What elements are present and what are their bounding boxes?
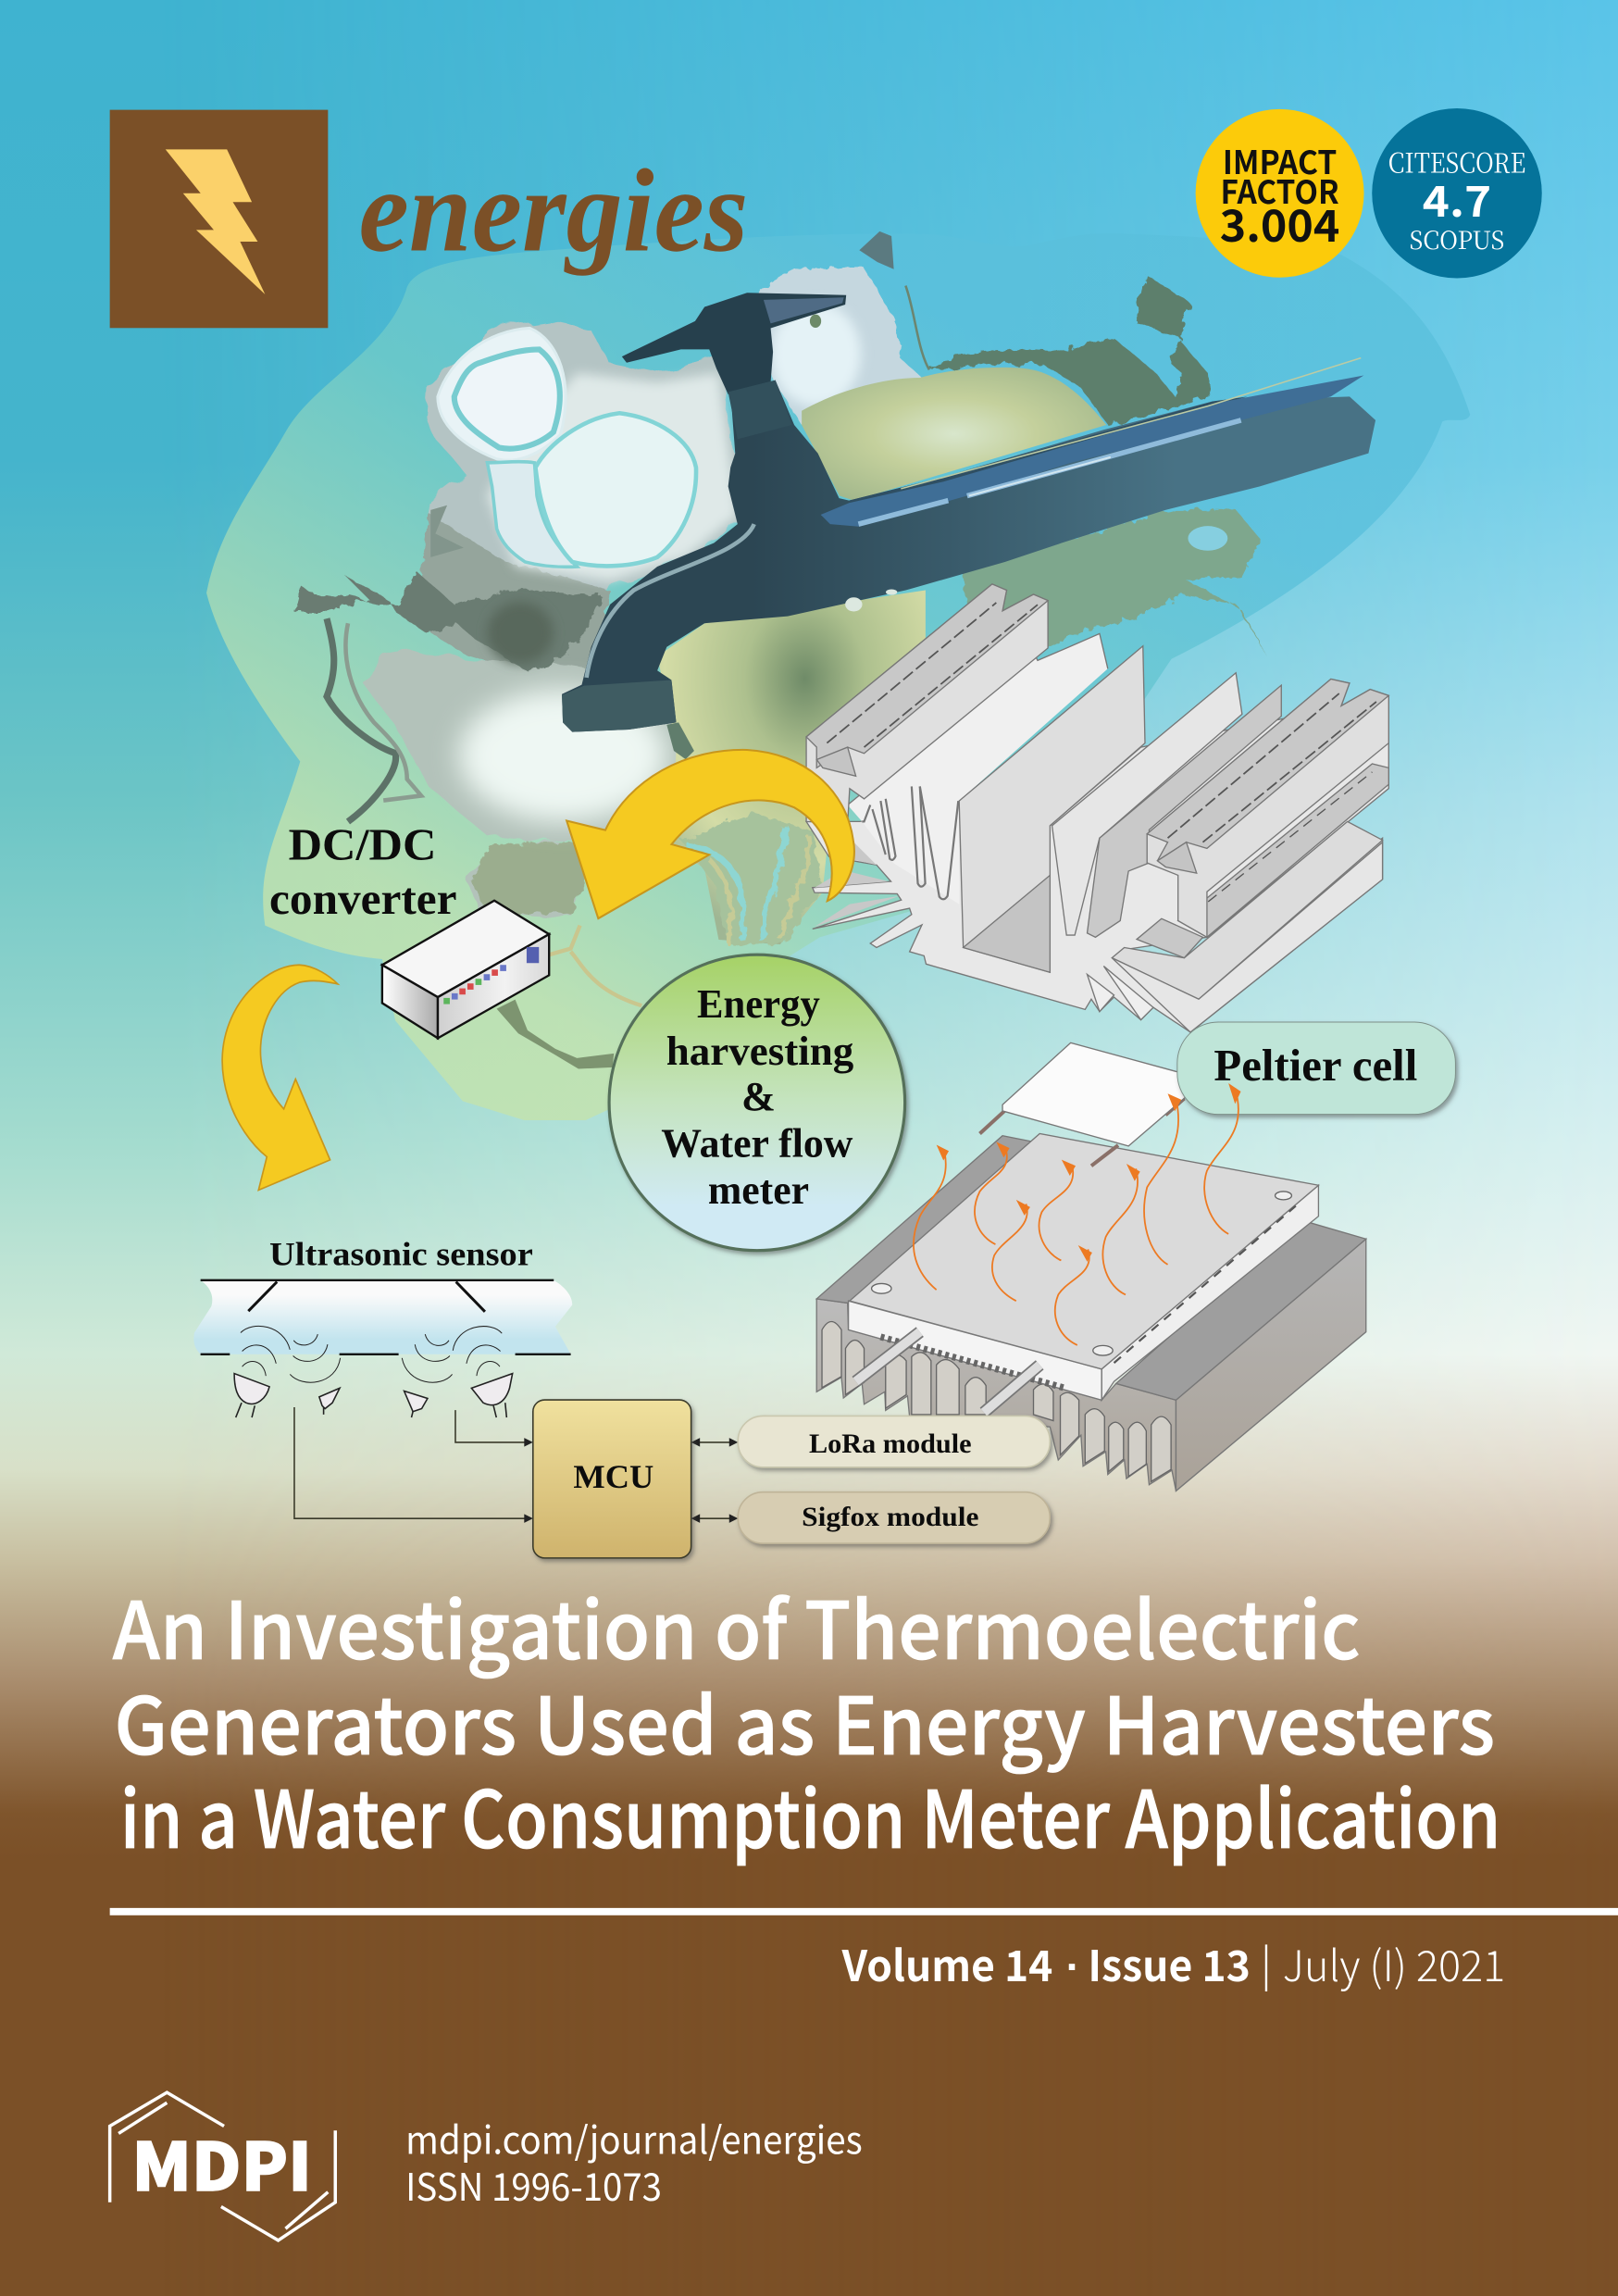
- drip under spout: [666, 722, 694, 759]
- plate screw holes: [872, 1192, 1291, 1355]
- badge: citescore: [1372, 108, 1542, 279]
- panel: energy harvesting bubble: Water flow: [661, 1120, 853, 1166]
- second coast thread: [345, 623, 421, 801]
- olive river streaks: [709, 836, 809, 944]
- arrow: upper yellow curved arrow: [566, 750, 854, 918]
- dark coast centre: [487, 602, 554, 664]
- label: DC/DC converter: DC/DC: [289, 818, 436, 869]
- grey spike faces: [815, 838, 899, 927]
- terrain: rivers near the converter: [497, 926, 641, 1069]
- label: DC/DC converter: [269, 818, 457, 924]
- illustration: water tap: [562, 293, 1375, 759]
- volume and issue line: Volume 14: [841, 1933, 1052, 1994]
- badge: impact factor: IMPACT: [1223, 138, 1337, 184]
- sink front fins: [816, 1299, 1176, 1491]
- icon: lightning bolt: [166, 149, 265, 294]
- green land under pipe: [963, 510, 1267, 656]
- fin arches: [822, 1321, 1171, 1481]
- handle highlight: [764, 297, 844, 323]
- peltier cell leads: [979, 1099, 1184, 1166]
- panel: energy harvesting bubble: &: [741, 1074, 776, 1119]
- badge: citescore: 4.7: [1423, 168, 1491, 230]
- pipe white stripe: [969, 457, 1111, 496]
- dark band above blue: [849, 396, 1248, 512]
- olive lower patch: [473, 841, 591, 917]
- box: MCU: MCU: [573, 1458, 653, 1495]
- pipe light stripe: [858, 420, 1241, 524]
- box: MCU: [533, 1400, 691, 1558]
- dark green coast: [929, 274, 1210, 426]
- badge: impact factor: [1196, 109, 1364, 278]
- divider rule: [110, 1908, 1618, 1915]
- stem collar shading: [728, 381, 792, 439]
- tan river: [549, 926, 641, 1005]
- badge: impact factor: FACTOR: [1221, 168, 1339, 214]
- illustration: ultrasonic pipe and transducers: [193, 1280, 572, 1382]
- panel: energy harvesting bubble: Energy: [697, 981, 820, 1027]
- panel: energy harvesting bubble: [609, 955, 905, 1251]
- yellow-olive land: [802, 368, 1106, 501]
- volume and issue line: July (I) 2021: [1283, 1933, 1505, 1994]
- icon: MDPI logo: MDPI: [131, 2115, 312, 2210]
- tap body, pipe and spout: [562, 381, 1375, 732]
- label: peltier cell: [1177, 1022, 1455, 1115]
- comb teeth: [880, 1337, 1066, 1389]
- journal URL and ISSN: ISSN 1996-1073: [405, 2156, 662, 2212]
- icon: DC/DC converter box: [382, 901, 549, 1038]
- article title: [113, 1567, 1500, 1871]
- arrow: left yellow curved arrow: [222, 965, 338, 1191]
- plate right edge: [1101, 1185, 1318, 1400]
- spout cap: [562, 680, 677, 732]
- terrain: right part with olive land: [759, 231, 1267, 656]
- volume and issue line: ·: [1066, 1942, 1080, 1990]
- lower cloud: [360, 652, 686, 917]
- fin root slots: [862, 786, 958, 899]
- background gradient: [0, 0, 1618, 1807]
- lower right fins: [1112, 821, 1383, 999]
- dark olive river: [497, 1000, 614, 1069]
- spout highlight: [587, 524, 754, 678]
- reed line: [901, 358, 1361, 489]
- white centre of lower cloud: [459, 690, 666, 821]
- box: LoRa module: LoRa module: [809, 1428, 972, 1459]
- small inlets at left of lakes: [430, 505, 464, 557]
- fin D: [1088, 685, 1281, 937]
- tap handle: [622, 293, 846, 394]
- pipe blue highlight: [821, 375, 1363, 527]
- pale white centre: [771, 302, 861, 406]
- label: peltier cell: Peltier cell: [1214, 1040, 1417, 1091]
- article title: Generators Used as Energy Harvesters: [114, 1663, 1495, 1778]
- big fin: [959, 646, 1145, 972]
- coast thread: [905, 286, 929, 369]
- panel: energy harvesting bubble: meter: [708, 1167, 809, 1213]
- hole in green land: [1188, 526, 1227, 551]
- lake land bridge: [487, 462, 577, 567]
- small island: [859, 231, 894, 269]
- pipe body: [193, 1280, 572, 1354]
- grey cloud around lakes: [426, 321, 742, 605]
- icon: MDPI logo: [110, 2092, 335, 2240]
- volume and issue line: [841, 1933, 1505, 1994]
- pale cloud inner: [487, 373, 738, 580]
- sink top right: [1116, 1220, 1366, 1400]
- icon: journal logo square: [110, 110, 328, 328]
- badge: citescore: CITESCORE: [1388, 143, 1525, 181]
- journal URL and ISSN: mdpi.com/journal/energies: [405, 2110, 863, 2165]
- left rail: [806, 584, 1048, 824]
- box: Sigfox module: [738, 1492, 1050, 1543]
- right rail: [1147, 679, 1388, 937]
- label: ultrasonic sensor: Ultrasonic sensor: [269, 1236, 533, 1273]
- sensor ticks: [248, 1281, 485, 1312]
- panel: energy harvesting bubble: harvesting: [666, 1029, 853, 1074]
- pipe outline: [201, 1280, 571, 1354]
- sound waves: [241, 1326, 502, 1382]
- box: Sigfox module: Sigfox module: [802, 1501, 979, 1532]
- volume and issue line: Issue 13: [1088, 1933, 1251, 1994]
- illustration: lower heat sink: [816, 1042, 1366, 1491]
- fin C: [1052, 673, 1242, 935]
- dark coast: [293, 571, 601, 673]
- base plate with spikes: [806, 698, 1388, 1032]
- white cloud behind handle: [759, 267, 922, 425]
- terminals: [856, 1332, 1039, 1413]
- label: DC/DC converter: converter: [269, 873, 457, 924]
- badge: impact factor: 3.004: [1220, 191, 1339, 255]
- article title: An Investigation of Thermoelectric: [113, 1567, 1361, 1682]
- icon: peltier cell: [1002, 1042, 1187, 1146]
- lake 2: [535, 413, 696, 566]
- lower rail: [1178, 764, 1388, 937]
- illustration: upper heat sink: [806, 584, 1388, 1032]
- grey link between upper and lower clouds: [421, 515, 657, 685]
- teal river streaks: [686, 827, 786, 940]
- journal URL and ISSN: [405, 2110, 863, 2212]
- outer white lake ring: [438, 328, 566, 460]
- olive valley under the tap: [657, 591, 926, 944]
- journal name: energies: [359, 144, 748, 276]
- heat flow arrows: [914, 1083, 1241, 1345]
- box: LoRa module: [738, 1416, 1050, 1467]
- badge: citescore: SCOPUS: [1410, 220, 1504, 256]
- pale fin: [848, 633, 1108, 905]
- river fan greens: [681, 812, 823, 944]
- U channel shadow: [964, 875, 1050, 972]
- lake 1: [454, 349, 560, 449]
- terrain: left part with lakes and clouds: [293, 321, 926, 944]
- plate top: [850, 1133, 1318, 1369]
- coast thread: [327, 618, 396, 821]
- plate front edge: [849, 1301, 1101, 1400]
- water drops: [810, 315, 897, 612]
- transducers: [234, 1374, 513, 1417]
- pale map silhouette: [206, 233, 1470, 1120]
- sink top left strip: [816, 1136, 1034, 1303]
- connectors from sensors to MCU: [294, 1407, 738, 1523]
- sink right side: [1176, 1239, 1366, 1491]
